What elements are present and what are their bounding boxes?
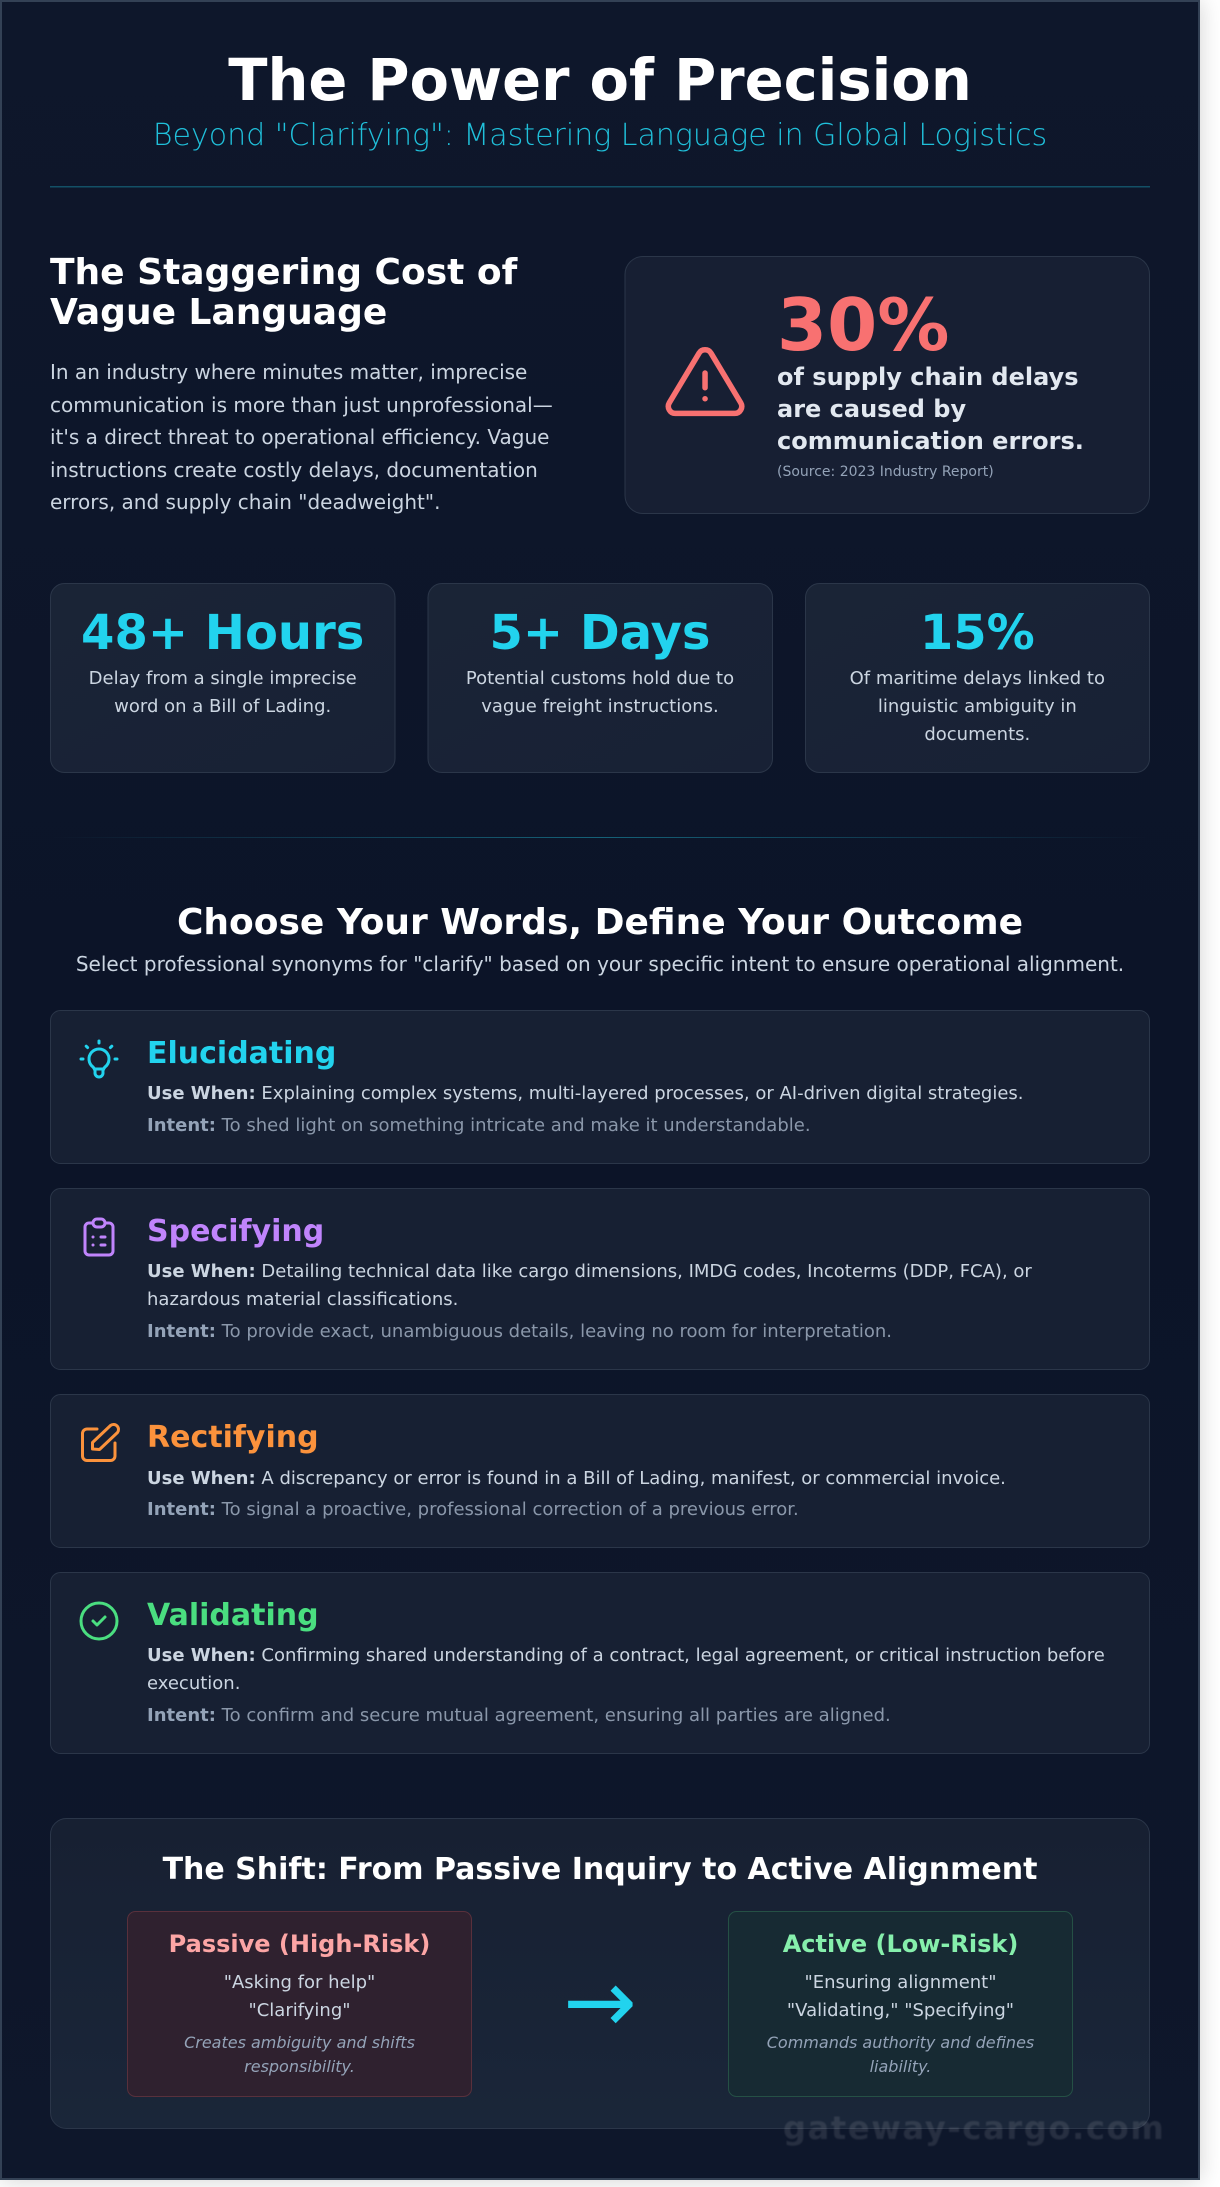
icon: clipboard list [85,1219,113,1255]
word title: Specifying [147,1214,324,1249]
consequence: Creates ambiguity and shifts [184,2033,415,2052]
heading: The Staggering Cost of [50,252,518,293]
box heading: Passive (High-Risk) [169,1930,430,1958]
panel: Elucidating [50,1010,1150,1164]
use when: Use When: Explaining complex systems, multi-layered processes, or AI-driven digital strategies. [147,1083,1024,1104]
use when: Use When: A discrepancy or error is found in a Bill of Lading, manifest, or commercial invoice. [147,1468,1006,1489]
word title: Elucidating [147,1036,336,1071]
intro paragraph: instructions create costly delays, documentation [50,458,538,482]
consequence: liability. [870,2057,931,2076]
intent: Intent: To signal a proactive, professional correction of a previous error. [147,1499,799,1520]
icon: warning triangle [668,350,742,413]
stat description: communication errors. [777,427,1084,455]
stat value: 5+ Days [490,605,710,661]
panel: stat 15 percent [806,584,1150,772]
examples: "Validating," "Specifying" [787,2000,1014,2021]
word title: Rectifying [147,1420,319,1455]
use when: hazardous material classifications. [147,1289,458,1310]
title: The Power of Precision [228,47,972,114]
panel: 30 percent stat card [625,256,1150,514]
heading: The Shift: From Passive Inquiry to Active Alignment [163,1852,1037,1887]
panel: stat 48+ hours [50,584,395,772]
examples: "Ensuring alignment" [804,1972,997,1993]
section divider [50,837,1150,838]
stat label: Of maritime delays linked to [850,668,1105,689]
examples: "Clarifying" [248,2000,351,2021]
use when: Confirming shared understanding of a contract, legal agreement, or critical instruction before [261,1645,1105,1666]
intent: Intent: To provide exact, unambiguous details, leaving no room for interpretation. [147,1321,892,1342]
panel: Specifying [50,1188,1150,1370]
stat description: are caused by [777,395,966,423]
stat label: linguistic ambiguity in [878,696,1077,717]
intent: Intent: To confirm and secure mutual agreement, ensuring all parties are aligned. [147,1705,891,1726]
use when: execution. [147,1673,240,1694]
consequence: Commands authority and defines [767,2033,1034,2052]
intent: Intent: To shed light on something intricate and make it understandable. [147,1115,811,1136]
box: passive [128,1912,472,2096]
stat description: of supply chain delays [777,363,1078,391]
panel: stat 5+ days [428,584,772,772]
intro paragraph: In an industry where minutes matter, imprecise [50,360,527,384]
intro paragraph: it's a direct threat to operational efficiency. Vague [50,425,549,449]
box: active [728,1912,1072,2096]
stat label: Delay from a single imprecise [89,668,357,689]
subtitle: Beyond "Clarifying": Mastering Language in Global Logistics [153,118,1047,153]
examples: "Asking for help" [224,1972,375,1993]
stat label: documents. [924,724,1030,745]
heading: Choose Your Words, Define Your Outcome [177,902,1023,943]
header divider [50,186,1150,188]
stat value: 15% [920,605,1035,661]
header [153,47,1047,153]
panel: Rectifying [50,1394,1150,1548]
box heading: Active (Low-Risk) [783,1930,1018,1958]
panel: cost of vague language [50,252,553,514]
heading: Vague Language [50,292,387,333]
stat value: 48+ Hours [81,605,364,661]
icon: lightbulb [81,1041,117,1077]
section heading [76,902,1124,976]
panel: Validating [50,1572,1150,1754]
icon: circle check [81,1603,117,1639]
arrow: → [563,1950,637,2053]
use when: Use When: [147,1645,256,1666]
stat label: word on a Bill of Lading. [114,696,331,717]
intro paragraph: communication is more than just unprofessional— [50,393,553,417]
word title: Validating [147,1598,319,1633]
stat label: vague freight instructions. [481,696,719,717]
section subtitle: Select professional synonyms for "clarify" based on your specific intent to ensure operational alignment. [76,952,1124,976]
source: (Source: 2023 Industry Report) [777,464,994,480]
watermark: gateway-cargo.com [783,2109,1165,2147]
panel: the shift [50,1818,1150,2128]
consequence: responsibility. [244,2057,355,2076]
big number: 30% [777,283,949,367]
intro paragraph: errors, and supply chain "deadweight". [50,490,440,514]
use when: Detailing technical data like cargo dimensions, IMDG codes, Incoterms (DDP, FCA), or [261,1261,1032,1282]
stat label: Potential customs hold due to [466,668,734,689]
use when: Use When: [147,1261,256,1282]
icon: pencil on square [82,1424,118,1461]
